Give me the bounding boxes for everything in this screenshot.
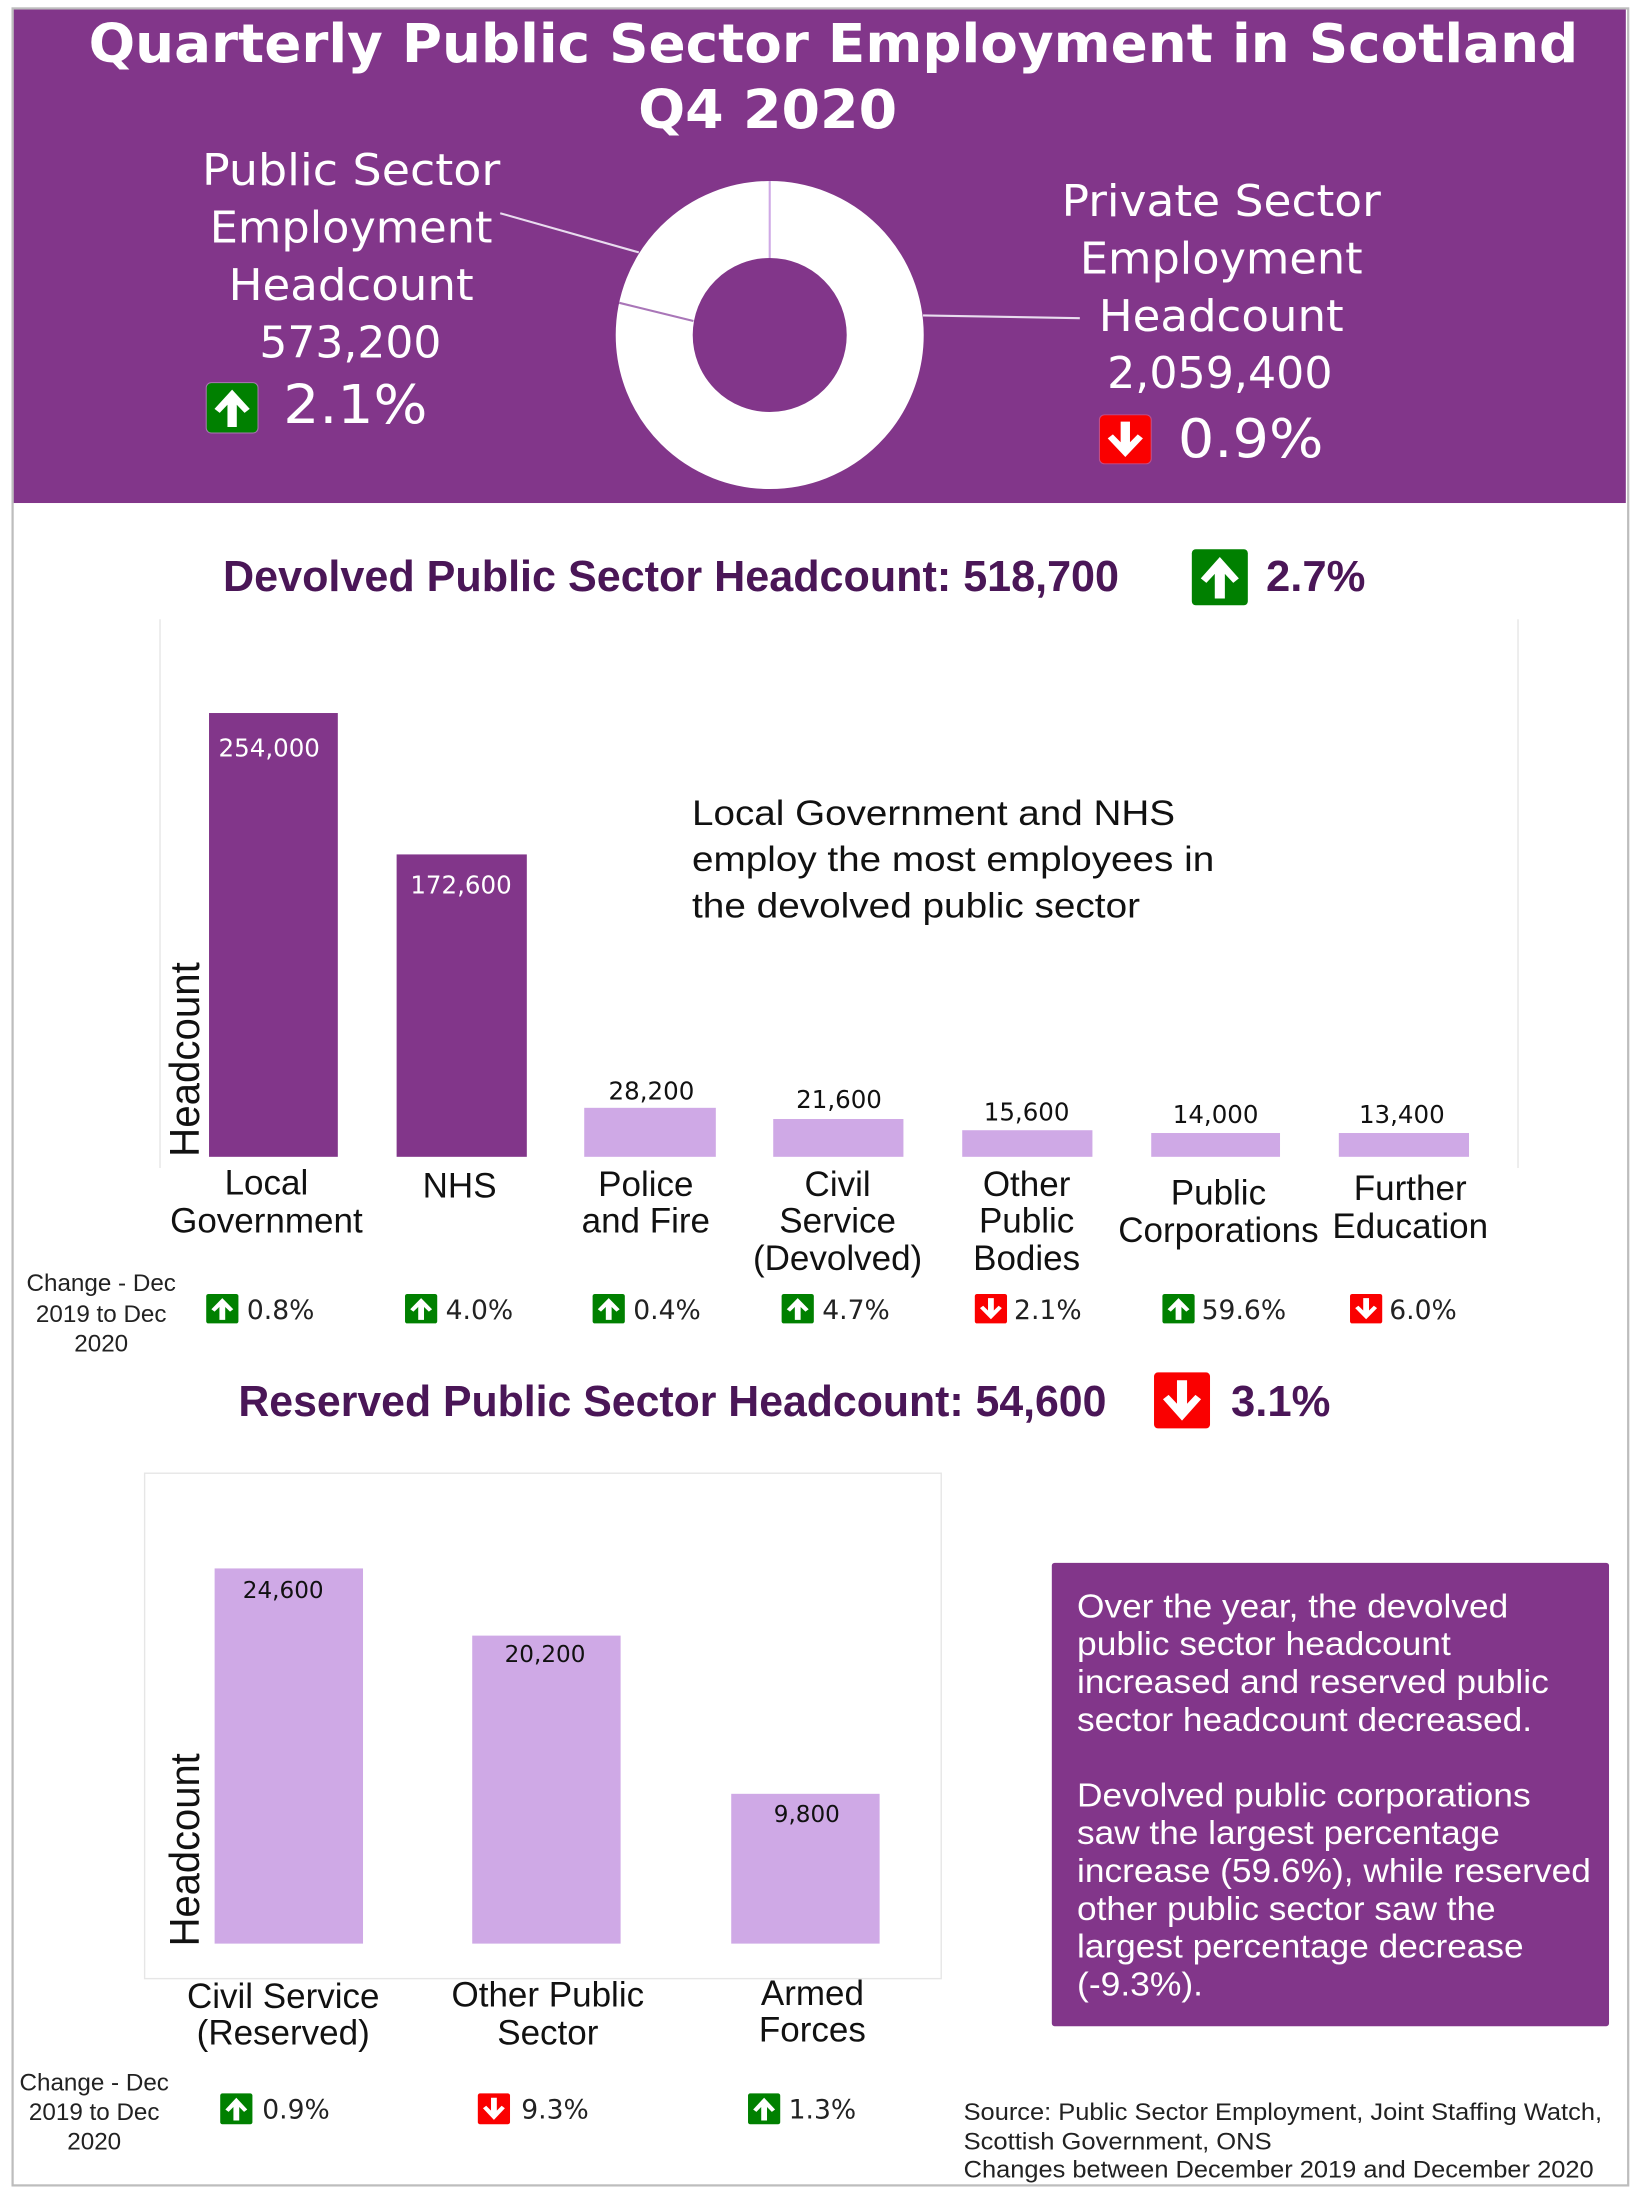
bar: NHS: NHS xyxy=(423,1166,497,1205)
change values: 9.3% xyxy=(521,2095,589,2126)
public sector label: Employment xyxy=(210,204,493,254)
private sector label xyxy=(1062,177,1381,470)
heading: devolved xyxy=(223,549,1365,605)
change row label: Change - Dec xyxy=(20,2070,169,2097)
change row: devolved xyxy=(27,1270,1457,1357)
bar: Other Public Sector: Other Public xyxy=(452,1976,644,2015)
bar: Police and Fire: 28,200 xyxy=(609,1076,694,1105)
change row label xyxy=(20,2070,169,2155)
change values: 0.8% xyxy=(247,1295,314,1326)
bar: Armed Forces xyxy=(731,1794,880,2050)
bar: Further Education: 13,400 xyxy=(1359,1100,1445,1129)
title: Q4 2020 xyxy=(638,79,897,141)
panel: summary callout: (-9.3%). xyxy=(1077,1966,1203,2003)
change row label: Change - Dec xyxy=(27,1270,176,1297)
public sector connector line xyxy=(500,213,639,252)
private sector label: 2,059,400 xyxy=(1107,349,1333,399)
bar: Local Government: Government xyxy=(170,1201,363,1240)
public sector label: Public Sector xyxy=(202,146,500,196)
bar: Armed Forces: Forces xyxy=(759,2011,866,2050)
change values: 6.0% xyxy=(1389,1295,1457,1326)
panel: summary callout: saw the largest percentage xyxy=(1077,1815,1500,1852)
bar: Public Corporations: 14,000 xyxy=(1173,1100,1258,1129)
bar: Civil Service (Reserved) xyxy=(187,1568,379,2052)
bar: Local Government xyxy=(170,713,363,1240)
axis title: Headcount xyxy=(161,962,208,1157)
change row label: 2019 to Dec xyxy=(36,1301,167,1328)
panel: summary callout: sector headcount decreased. xyxy=(1077,1702,1532,1739)
bar: Civil Service (Devolved) xyxy=(753,1085,922,1278)
panel: summary callout: public sector headcount xyxy=(1077,1626,1452,1663)
bar: NHS: 172,600 xyxy=(410,871,512,900)
bar: Public Corporations xyxy=(1118,1100,1319,1250)
change values xyxy=(262,2095,856,2126)
private sector connector line xyxy=(923,315,1080,318)
change row label: 2019 to Dec xyxy=(29,2099,160,2126)
change values: 4.7% xyxy=(822,1295,890,1326)
bar chart: devolved public sector xyxy=(160,619,1518,1278)
bar chart: reserved public sector xyxy=(145,1473,941,2052)
public sector label: 2.1% xyxy=(283,374,427,436)
change icons xyxy=(206,1294,1382,1323)
public sector label: 573,200 xyxy=(259,318,441,368)
public sector label: Headcount xyxy=(229,261,474,311)
icon: green up arrow large xyxy=(1192,549,1248,605)
bar: Armed Forces: Armed xyxy=(761,1974,864,2013)
bar: Other Public Bodies: Other xyxy=(983,1165,1071,1204)
bar: Civil Service (Reserved): 24,600 xyxy=(243,1578,324,1604)
change values: 4.0% xyxy=(446,1295,513,1326)
bar: Civil Service (Devolved): Civil xyxy=(805,1165,871,1204)
bar: NHS xyxy=(397,854,527,1205)
change values: 0.9% xyxy=(262,2095,330,2126)
icon: green up arrow xyxy=(206,383,258,433)
bar: Further Education xyxy=(1332,1100,1488,1246)
heading: devolved: Devolved Public Sector Headcount: 518,700 xyxy=(223,553,1119,601)
bar: Civil Service (Devolved): (Devolved) xyxy=(753,1239,922,1278)
bar: Civil Service (Devolved): 21,600 xyxy=(796,1085,882,1114)
bar: Other Public Sector xyxy=(452,1636,644,2052)
bar: Civil Service (Reserved): Civil Service xyxy=(187,1977,379,2016)
bar: Local Government: 254,000 xyxy=(219,733,320,762)
panel: summary callout xyxy=(1052,1563,1609,2026)
bar: Police and Fire: Police xyxy=(598,1165,693,1204)
change row: reserved xyxy=(20,2070,856,2155)
bar: Further Education: Education xyxy=(1332,1207,1488,1246)
source note: Changes between December 2019 and December 2020 xyxy=(964,2156,1594,2183)
private sector label: Private Sector xyxy=(1062,177,1381,227)
private sector label: Headcount xyxy=(1099,292,1344,342)
axis title: Headcount xyxy=(161,1753,208,1946)
private sector label: Employment xyxy=(1080,234,1363,284)
icon: red down arrow xyxy=(1099,415,1151,464)
panel: summary callout: increased and reserved public xyxy=(1077,1664,1549,1701)
bar: Local Government: Local xyxy=(225,1164,308,1203)
bar: Other Public Bodies: Bodies xyxy=(973,1239,1080,1278)
panel: summary callout: other public sector saw the xyxy=(1077,1891,1496,1928)
bar: Police and Fire xyxy=(582,1076,716,1240)
title: Quarterly Public Sector Employment in Scotland xyxy=(89,13,1578,75)
panel: summary callout: largest percentage decrease xyxy=(1077,1929,1524,1966)
change row label: 2020 xyxy=(67,2128,121,2155)
bar: Civil Service (Reserved): (Reserved) xyxy=(197,2013,370,2052)
bar: Further Education: Further xyxy=(1354,1169,1467,1208)
chart annotation: the devolved public sector xyxy=(692,886,1140,925)
bar: Other Public Bodies: 15,600 xyxy=(984,1097,1069,1126)
change row label: 2020 xyxy=(74,1330,128,1357)
chart annotation: Local Government and NHS xyxy=(692,794,1175,833)
change values: 1.3% xyxy=(789,2095,856,2126)
change row label xyxy=(27,1270,176,1357)
panel: summary callout: increase (59.6%), while reserved xyxy=(1077,1853,1591,1890)
chart annotation xyxy=(692,794,1214,925)
chart annotation: employ the most employees in xyxy=(692,840,1214,879)
change values: 59.6% xyxy=(1202,1295,1286,1326)
source note xyxy=(964,2099,1602,2183)
source note: Scottish Government, ONS xyxy=(964,2128,1272,2155)
title xyxy=(89,13,1578,141)
heading: reserved: Reserved Public Sector Headcount: 54,600 xyxy=(238,1378,1106,1426)
bar: Civil Service (Devolved): Service xyxy=(779,1201,896,1240)
heading: reserved xyxy=(238,1372,1330,1428)
icon: red down arrow large xyxy=(1154,1372,1210,1428)
bar: Other Public Sector: 20,200 xyxy=(505,1642,585,1668)
bar: Armed Forces: 9,800 xyxy=(774,1802,840,1828)
private sector label: 0.9% xyxy=(1178,408,1323,470)
donut chart xyxy=(619,181,885,451)
bar: Public Corporations: Public xyxy=(1171,1173,1266,1212)
change values xyxy=(247,1295,1457,1326)
panel: summary callout: Over the year, the devolved xyxy=(1077,1588,1508,1625)
heading: reserved: 3.1% xyxy=(1231,1378,1330,1426)
source note: Source: Public Sector Employment, Joint Staffing Watch, xyxy=(964,2099,1602,2126)
panel: summary callout: Devolved public corporations xyxy=(1077,1777,1531,1814)
change icons xyxy=(220,2093,780,2124)
change values: 2.1% xyxy=(1014,1295,1082,1326)
bar: Police and Fire: and Fire xyxy=(582,1201,710,1240)
public sector label xyxy=(202,146,500,436)
change values: 0.4% xyxy=(633,1295,701,1326)
bar: Other Public Bodies xyxy=(962,1097,1092,1278)
bar: Other Public Bodies: Public xyxy=(979,1201,1074,1240)
panel: header xyxy=(14,10,1626,503)
bar: Public Corporations: Corporations xyxy=(1118,1211,1319,1250)
bar: Other Public Sector: Sector xyxy=(497,2013,599,2052)
heading: devolved: 2.7% xyxy=(1266,553,1365,601)
